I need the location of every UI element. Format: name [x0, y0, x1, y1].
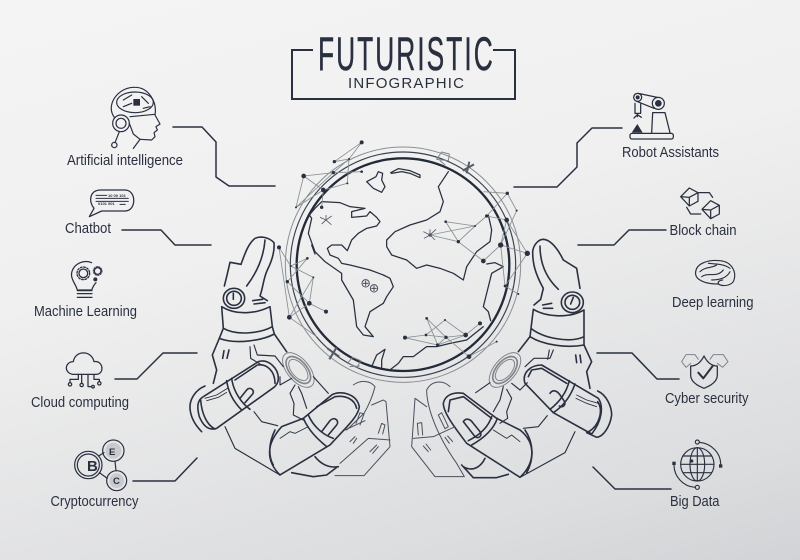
icon: speech bubble [89, 190, 134, 217]
palm ring [483, 347, 527, 393]
item: deep learning [672, 260, 754, 311]
coin letter c: C [113, 476, 120, 487]
label: Artificial intelligence [67, 152, 183, 169]
label: Cyber security [665, 390, 749, 407]
thumb [533, 239, 580, 308]
icon: shield with check [682, 355, 728, 388]
network: lower right [403, 317, 498, 359]
item: block chain [670, 188, 736, 239]
icon: satellite bottom [347, 357, 361, 367]
item: machine learning [34, 261, 137, 320]
lower finger [270, 393, 359, 477]
coin letter b: B [87, 458, 98, 475]
label: Machine Learning [34, 303, 137, 320]
wrist cuff [518, 309, 592, 388]
label: Chatbot [65, 220, 112, 237]
back fingers [412, 382, 464, 477]
icon: robot arm [630, 93, 673, 139]
icon: linked coins [75, 440, 127, 491]
icon: satellite top [437, 152, 449, 165]
item: robot assistants [622, 93, 719, 161]
right robot hand [412, 239, 612, 478]
item: chatbot [65, 190, 134, 237]
back fingers [335, 381, 390, 476]
coin letter e: E [109, 447, 115, 458]
icon: gears on map [362, 280, 378, 292]
left robot hand [190, 237, 390, 477]
icon: cross bottom [327, 347, 339, 359]
upper finger [524, 365, 612, 437]
power button [223, 288, 245, 308]
label: Block chain [670, 222, 736, 239]
item: cyber security [665, 355, 749, 407]
palm ring [277, 347, 320, 393]
thumb [224, 237, 274, 304]
network: upper left [295, 140, 364, 209]
icon: data burst west [320, 215, 332, 225]
network: right [428, 192, 530, 295]
icon: brain [696, 260, 735, 286]
icon: data burst east [423, 229, 436, 240]
subheading: infographic: INFOGRAPHIC [348, 75, 464, 92]
palm circuits [225, 345, 328, 475]
palm circuits [476, 350, 575, 477]
icon: linked cubes [681, 188, 719, 219]
item: artificial intelligence [67, 87, 183, 169]
power button [561, 292, 583, 313]
bubble digits: 10 00 101 [108, 193, 127, 198]
label: Robot Assistants [622, 144, 719, 161]
icon: cloud with circuit [66, 353, 102, 388]
network: left [277, 245, 328, 337]
title [292, 29, 515, 99]
icon: light bulb with gears [72, 261, 102, 297]
item: cloud computing [31, 353, 129, 411]
icon: cross top [463, 162, 474, 173]
globe rings [285, 147, 521, 382]
label: Deep learning [672, 294, 754, 311]
icon: globe with orbit [672, 440, 722, 489]
label: Big Data [670, 493, 720, 510]
item: cryptocurrency [50, 440, 139, 510]
continents [308, 169, 503, 369]
wrist cuff [212, 307, 287, 383]
upper finger [190, 361, 278, 432]
icon: ai head [111, 87, 160, 148]
connector lines [115, 127, 679, 489]
label: Cryptocurrency [50, 493, 139, 510]
heading: futuristic: FUTURISTIC [318, 29, 493, 81]
label: Cloud computing [31, 394, 129, 411]
item: big data [670, 440, 722, 510]
bubble digits: 0101 001 [98, 201, 115, 206]
title frame [292, 50, 515, 99]
globe [277, 140, 530, 382]
lower finger [443, 393, 532, 478]
